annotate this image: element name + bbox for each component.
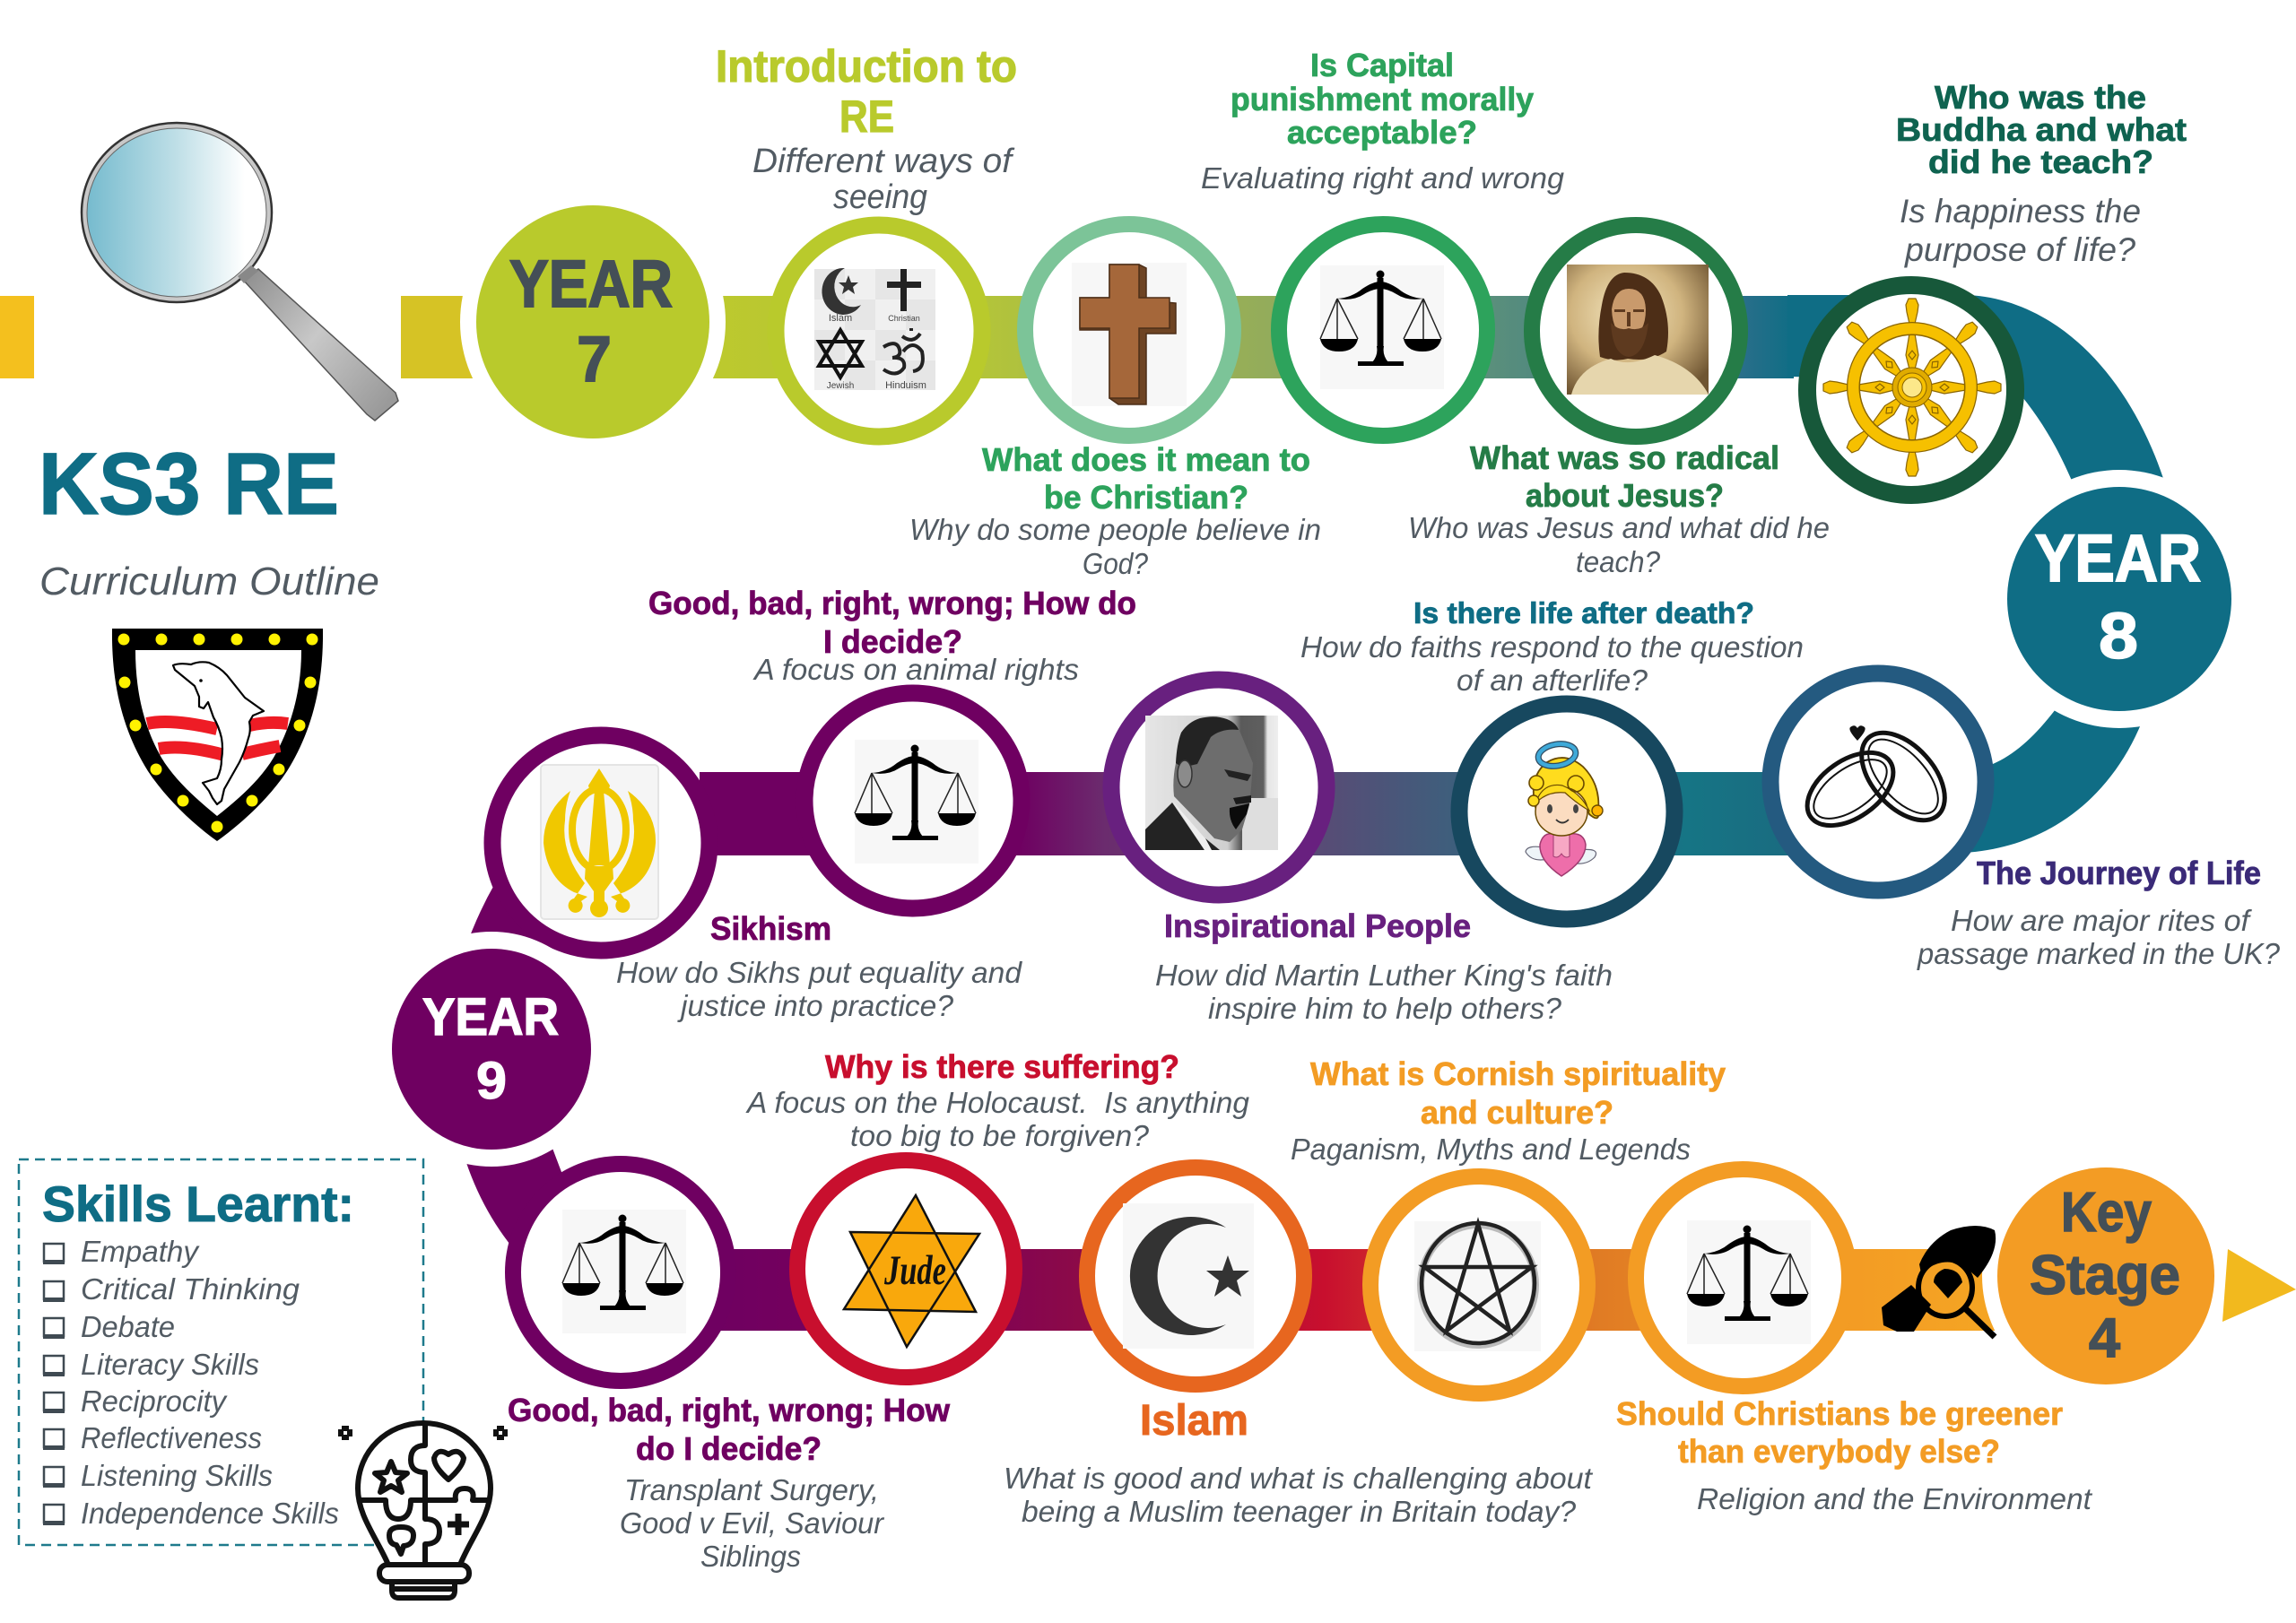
description: How do faiths respond to the question xyxy=(1300,630,1804,664)
ring xyxy=(776,225,982,437)
description xyxy=(1004,1462,1594,1528)
ring xyxy=(1111,680,1326,895)
badge: year 9: 9 xyxy=(476,1052,507,1110)
subtitle: curriculum outline: Curriculum Outline xyxy=(39,560,379,603)
ring xyxy=(804,693,1022,908)
stop: The Journey of Life xyxy=(1770,673,2281,970)
heading: Is Capital xyxy=(1310,47,1454,83)
ring xyxy=(492,735,709,950)
ribbon: year 9 timeline bar xyxy=(718,1249,2009,1331)
description: teach? xyxy=(1576,545,1661,578)
ribbon: curve from year 9 to row three xyxy=(459,1139,574,1248)
icon: scales xyxy=(562,1210,686,1333)
icon: portrait of Martin Luther King xyxy=(1145,716,1278,850)
icon: yellow star with Jude: Jude xyxy=(883,1247,946,1294)
ring xyxy=(797,1160,1014,1377)
stop: What is Cornish spirituality xyxy=(1291,1055,1726,1393)
stop: Inspirational People xyxy=(1111,680,1613,1025)
heading: Should Christians be greener xyxy=(1616,1395,2063,1432)
badge: year 8: 8 xyxy=(2099,601,2138,673)
heading: The Journey of Life xyxy=(1977,855,2261,891)
description: How did Martin Luther King's faith xyxy=(1155,959,1613,992)
heading: I decide? xyxy=(823,623,962,660)
checklist: Critical Thinking xyxy=(81,1272,300,1306)
heading xyxy=(508,1392,951,1467)
icon: dharma wheel xyxy=(1823,299,2001,476)
description xyxy=(1917,904,2281,970)
ribbon: curve from year 8 to row two xyxy=(1928,690,2152,853)
badge: year 8: YEAR xyxy=(2035,521,2201,595)
icon: portrait of Jesus xyxy=(1567,265,1709,395)
icon: yellow star with Jude xyxy=(844,1195,979,1347)
ribbon: curve down to year 8 xyxy=(1787,295,2170,502)
description: justice into practice? xyxy=(677,989,954,1022)
ribbon: curve from row two to year 9 xyxy=(465,883,583,950)
description: of an afterlife? xyxy=(1457,664,1648,697)
checklist: Reciprocity xyxy=(81,1384,228,1418)
heading: RE xyxy=(839,91,894,142)
badge: year 7: YEAR xyxy=(509,247,673,321)
ring xyxy=(1807,285,2015,495)
badge: year 9 xyxy=(374,932,609,1167)
description: too big to be forgiven? xyxy=(850,1119,1150,1152)
description: Good v Evil, Saviour xyxy=(620,1506,885,1540)
stop: Sikhism xyxy=(492,735,1023,1022)
icon: wooden cross xyxy=(1072,263,1187,406)
stop: Should Christians be greener xyxy=(1616,1169,2093,1515)
heading xyxy=(648,585,1136,660)
checklist: Independence Skills xyxy=(81,1497,339,1530)
description xyxy=(620,1473,885,1573)
description: passage marked in the UK? xyxy=(1917,937,2281,970)
badge: key stage 4: Key xyxy=(2061,1182,2152,1244)
stop: Who was the Buddha xyxy=(1807,79,2187,495)
icon: angel xyxy=(1526,742,1603,876)
heading: Buddha and what xyxy=(1896,111,2187,148)
badge: key stage 4: Stage xyxy=(2030,1245,2180,1306)
icon: sparkle left xyxy=(338,1426,352,1440)
stop: Good, bad, right, wrong - animal rights xyxy=(648,585,1136,908)
stop: Is there life after death xyxy=(1300,596,1804,919)
ring xyxy=(1370,1176,1587,1393)
description: Paganism, Myths and Legends xyxy=(1291,1133,1691,1166)
icon: puzzle light bulb xyxy=(358,1423,491,1598)
checklist: Listening Skills xyxy=(81,1459,273,1492)
icon: pentagram xyxy=(1414,1221,1541,1351)
ring xyxy=(1532,225,1740,437)
heading xyxy=(1896,79,2187,180)
description xyxy=(1155,959,1613,1025)
ring xyxy=(1770,673,1986,890)
icon: scales xyxy=(1320,265,1444,389)
badge: key stage 4 xyxy=(1982,1152,2230,1400)
description: Evaluating right and wrong xyxy=(1201,161,1565,195)
icon: four faith symbols: Islam xyxy=(829,313,852,324)
icon: magnifying glass xyxy=(82,123,398,421)
stop: What was so radical about Jesus xyxy=(1408,225,1830,578)
heading: Inspirational People xyxy=(1164,907,1471,944)
heading: Why is there suffering? xyxy=(825,1048,1179,1085)
icon: four faith symbols: Christian xyxy=(888,314,920,323)
badge: year 7: 7 xyxy=(577,324,612,395)
description xyxy=(745,1086,1250,1152)
description xyxy=(616,956,1023,1022)
heading: What was so radical xyxy=(1470,439,1779,476)
arrow: onward to key stage 4 xyxy=(2222,1249,2296,1322)
heading xyxy=(1310,1055,1726,1131)
description xyxy=(1408,511,1830,578)
description: Religion and the Environment xyxy=(1697,1482,2093,1515)
title: KS3 RE: KS3 RE xyxy=(39,435,339,533)
icon: four faith symbols: Hinduism xyxy=(885,380,926,391)
stop: Introduction to RE xyxy=(716,41,1017,437)
icon: sparkle right xyxy=(493,1426,508,1440)
heading: do I decide? xyxy=(636,1430,822,1467)
heading: did he teach? xyxy=(1928,143,2153,180)
icon: crescent and star xyxy=(1123,1203,1254,1349)
heading: What does it mean to xyxy=(982,441,1310,478)
badge: year 9: YEAR xyxy=(422,988,559,1046)
badge: year 8 xyxy=(1990,470,2248,728)
description xyxy=(909,513,1321,580)
heading: What is Cornish spirituality xyxy=(1310,1055,1726,1092)
checklist: Literacy Skills xyxy=(81,1348,259,1381)
heading: be Christian? xyxy=(1044,479,1248,516)
icon: four faith symbols xyxy=(814,268,935,391)
description xyxy=(1300,630,1804,697)
heading xyxy=(982,441,1310,516)
badge: year 7 xyxy=(460,189,726,455)
heading: Good, bad, right, wrong; How xyxy=(508,1392,951,1428)
heading xyxy=(716,41,1017,142)
ribbon: year 8 timeline bar xyxy=(700,772,1803,855)
ring xyxy=(513,1164,728,1381)
description: being a Muslim teenager in Britain today? xyxy=(1022,1495,1577,1528)
heading: Sikhism xyxy=(710,910,831,947)
heading xyxy=(1470,439,1779,514)
description: How do Sikhs put equality and xyxy=(616,956,1023,989)
description: A focus on the Holocaust. Is anything xyxy=(745,1086,1250,1119)
description xyxy=(752,143,1015,216)
badge: key stage 4: 4 xyxy=(2089,1307,2121,1369)
description: A focus on animal rights xyxy=(752,653,1079,686)
ring xyxy=(1279,224,1487,436)
description: How are major rites of xyxy=(1951,904,2253,937)
panel border xyxy=(19,1159,423,1545)
description: inspire him to help others? xyxy=(1208,992,1562,1025)
description: seeing xyxy=(833,178,927,216)
heading: Is there life after death? xyxy=(1413,596,1754,629)
description: Different ways of xyxy=(752,143,1015,180)
heading xyxy=(1231,47,1534,151)
heading: and culture? xyxy=(1421,1094,1613,1131)
icon: Khanda xyxy=(541,765,658,919)
ring xyxy=(1636,1169,1849,1386)
icon: scales xyxy=(1687,1220,1811,1344)
checklist: Debate xyxy=(81,1310,175,1343)
heading: Introduction to xyxy=(716,41,1017,91)
stop: Why is there suffering xyxy=(745,1048,1250,1377)
heading: than everybody else? xyxy=(1678,1433,2000,1470)
checklist xyxy=(43,1235,339,1530)
stop: Islam xyxy=(1004,1167,1594,1528)
heading: Skills Learnt: xyxy=(42,1176,354,1232)
icon: school shield with dolphin xyxy=(112,629,323,841)
heading: punishment morally xyxy=(1231,81,1534,117)
stop: What does it mean to be Christian xyxy=(909,224,1321,580)
description: purpose of life? xyxy=(1904,231,2135,268)
icon: footprints with magnifier xyxy=(1882,1226,1996,1337)
heading: Who was the xyxy=(1935,79,2146,116)
checklist: Reflectiveness xyxy=(81,1421,262,1454)
ribbon: entry bar segments xyxy=(0,296,491,378)
icon: scales xyxy=(855,740,978,864)
description: God? xyxy=(1083,547,1149,580)
description: Why do some people believe in xyxy=(909,513,1321,546)
icon: four faith symbols: Jewish xyxy=(827,381,854,391)
heading: about Jesus? xyxy=(1526,477,1724,514)
description: Siblings xyxy=(700,1540,801,1573)
description: Is happiness the xyxy=(1900,193,2141,230)
ring xyxy=(1025,224,1233,436)
heading: acceptable? xyxy=(1287,114,1477,151)
ring xyxy=(1087,1167,1304,1384)
panel: skills learnt xyxy=(19,1159,423,1545)
description xyxy=(1900,193,2141,268)
heading xyxy=(1616,1395,2063,1470)
description: Transplant Surgery, xyxy=(624,1473,879,1506)
stop: Is Capital punishment morally acceptable xyxy=(1201,47,1565,436)
heading: Islam xyxy=(1140,1397,1248,1445)
ring xyxy=(1459,704,1674,919)
description: What is good and what is challenging about xyxy=(1004,1462,1594,1495)
description: Who was Jesus and what did he xyxy=(1408,511,1830,544)
icon: wedding rings xyxy=(1794,717,1961,840)
ribbon: year 7 timeline bar xyxy=(709,296,1794,378)
stop: Good, bad, right, wrong - transplant surgery xyxy=(508,1164,951,1573)
checklist: Empathy xyxy=(81,1235,201,1268)
heading: Good, bad, right, wrong; How do xyxy=(648,585,1136,621)
